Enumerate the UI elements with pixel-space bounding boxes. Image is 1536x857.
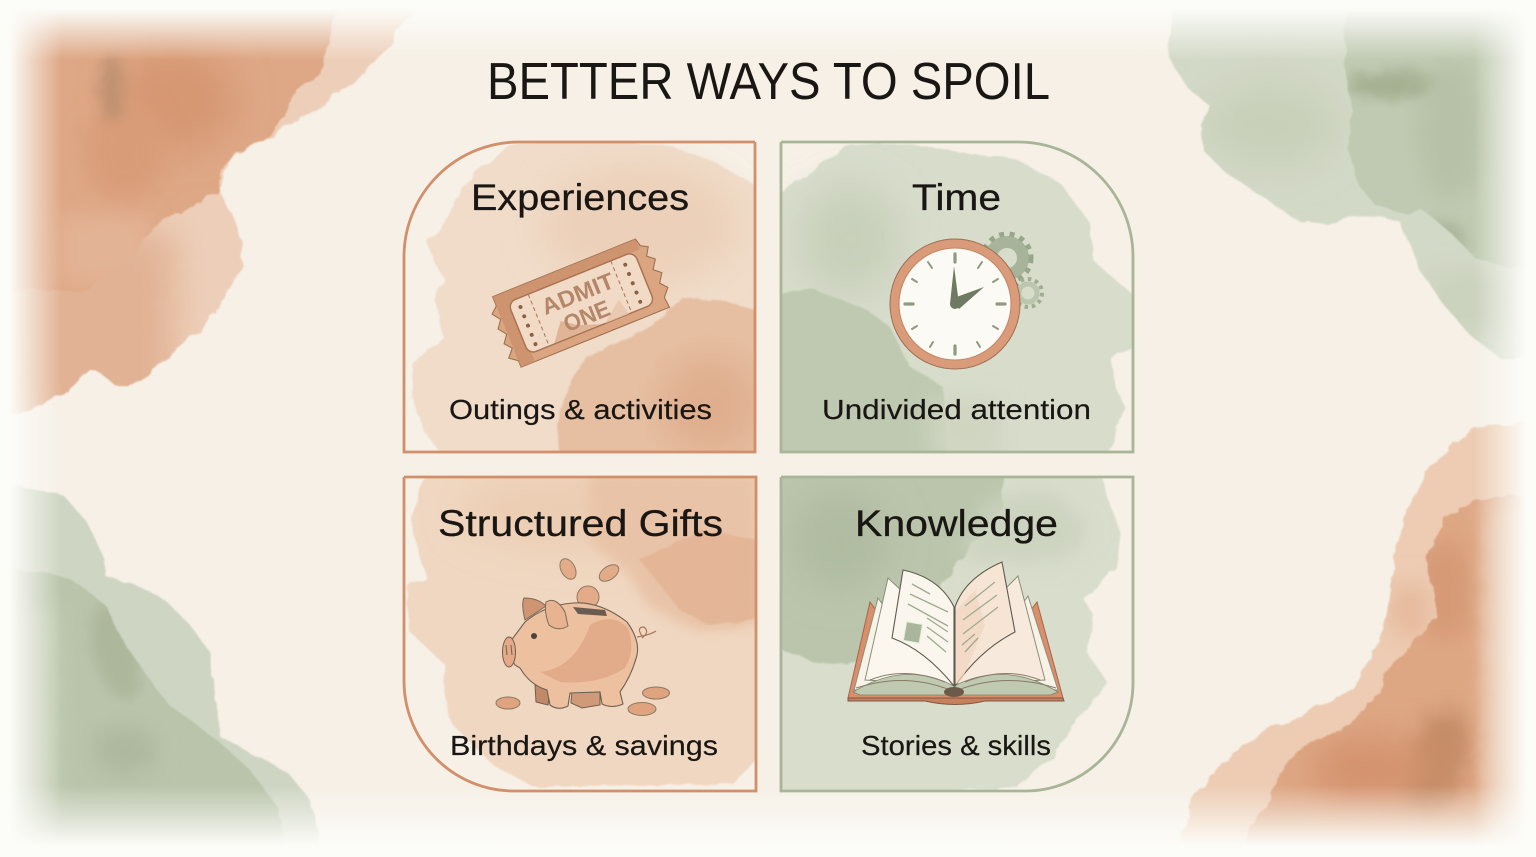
- icon: admit one ticket: ADMIT: [538, 267, 618, 320]
- icon: admit one ticket: [485, 235, 675, 370]
- card border: structured gifts: [404, 477, 756, 791]
- watercolor wash: knowledge: [778, 474, 1120, 794]
- pig: [502, 598, 656, 708]
- panel: experiences: [404, 140, 760, 456]
- caption: structured gifts: Birthdays & savings: [450, 730, 718, 761]
- falling coins: [557, 556, 622, 608]
- icon: piggy bank with coins: [496, 556, 670, 716]
- panel: knowledge: [778, 474, 1133, 794]
- heading: structured gifts: Structured Gifts: [438, 503, 723, 544]
- title: BETTER WAYS TO SPOIL: [487, 53, 1050, 111]
- watercolor wash: structured gifts: [407, 470, 758, 787]
- card border: experiences: [404, 142, 755, 452]
- icon: open book: [848, 562, 1064, 704]
- heading: time: Time: [912, 177, 1001, 218]
- icon: clock with gears: [890, 234, 1042, 369]
- icon: admit one ticket: ONE: [559, 295, 614, 337]
- card border: knowledge: [781, 477, 1133, 791]
- caption: time: Undivided attention: [822, 394, 1091, 425]
- watercolor wash: time: [778, 143, 1136, 460]
- panel: structured gifts: [404, 470, 758, 791]
- watercolor: bottom-left green: [16, 488, 318, 838]
- caption: experiences: Outings & activities: [449, 394, 712, 425]
- watercolor wash: experiences: [412, 140, 760, 456]
- heading: knowledge: Knowledge: [855, 503, 1058, 544]
- watercolor: top-left orange: [14, 13, 406, 414]
- panel: time: [778, 142, 1136, 460]
- watercolor: top-right green: [1168, 16, 1519, 360]
- card border: time: [781, 142, 1133, 452]
- floor coins: [496, 687, 670, 716]
- heading: experiences: Experiences: [471, 177, 689, 218]
- caption: knowledge: Stories & skills: [861, 730, 1051, 761]
- watercolor: bottom-right orange: [1182, 424, 1522, 841]
- gears: [983, 234, 1042, 307]
